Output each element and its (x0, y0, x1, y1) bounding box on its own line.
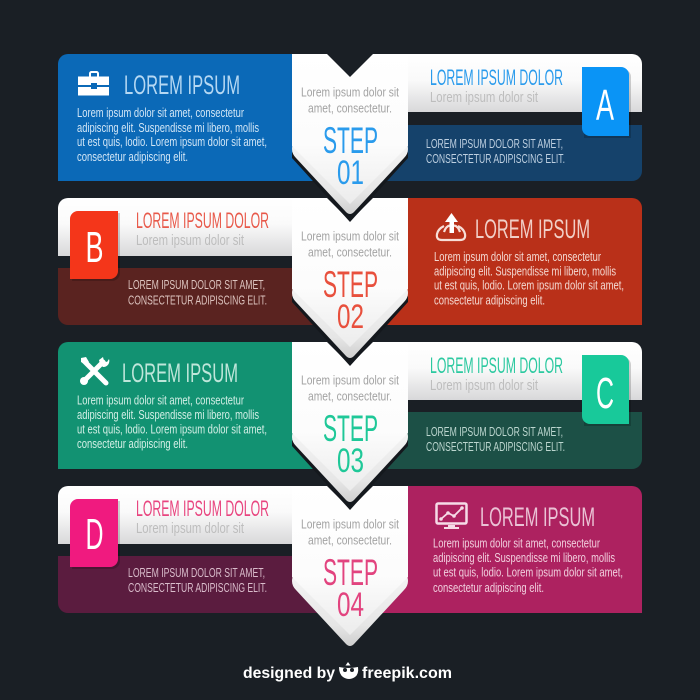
arrow step 04 (292, 486, 408, 646)
arrow step 01: STEP (323, 120, 378, 161)
badge C (582, 355, 631, 426)
arrow step 03: STEP (323, 408, 378, 449)
arrow step 02: Lorem ipsum dolor sit (301, 228, 399, 244)
caps text A: LOREM IPSUM DOLOR SIT AMET, (426, 137, 563, 151)
subheading A: Lorem ipsum dolor sit (430, 89, 539, 106)
subheading B: Lorem ipsum dolor sit (136, 232, 245, 249)
body text: ut est quis, lodio. Lorem ipsum dolor sit amet, (434, 278, 624, 292)
caps text D: LOREM IPSUM DOLOR SIT AMET, (128, 566, 265, 580)
panel: A right white (408, 54, 642, 112)
footer credit (243, 662, 452, 682)
caps text C: CONSECTETUR ADIPISCING ELIT. (426, 440, 565, 454)
arrow step 04: 04 (337, 586, 364, 624)
body text: Lorem ipsum dolor sit amet, consectetur (433, 536, 600, 550)
panel: C right white (408, 342, 642, 400)
heading B: LOREM IPSUM DOLOR (136, 208, 269, 233)
body text (77, 106, 267, 164)
arrow step 02: amet, consectetur. (308, 244, 392, 260)
heading C: LOREM IPSUM DOLOR (430, 353, 563, 378)
body text: consectetur adipiscing elit. (77, 150, 188, 164)
arrow step 02: 02 (337, 298, 364, 336)
panel: B dark band (58, 268, 330, 325)
step 3 row (58, 342, 642, 510)
icon: briefcase (78, 72, 109, 96)
panel: B left white (58, 198, 292, 256)
subheading D: Lorem ipsum dolor sit (136, 520, 245, 537)
arrow step 01: amet, consectetur. (308, 100, 392, 116)
arrow step 02: STEP (323, 264, 378, 305)
body text: ut est quis, lodio. Lorem ipsum dolor sit amet, (77, 422, 267, 436)
caps text B (128, 278, 267, 308)
caps text D: CONSECTETUR ADIPISCING ELIT. (128, 581, 267, 595)
body text: Lorem ipsum dolor sit amet, consectetur (77, 106, 244, 120)
heading: LOREM IPSUM (124, 70, 240, 100)
caps text C (426, 425, 565, 454)
step 2 row (58, 198, 642, 366)
caps text C: LOREM IPSUM DOLOR SIT AMET, (426, 425, 563, 439)
subheading C: Lorem ipsum dolor sit (430, 377, 539, 394)
icon: cloud upload (437, 213, 465, 240)
badge D: D (86, 510, 104, 559)
body text (433, 536, 623, 595)
caps text B: LOREM IPSUM DOLOR SIT AMET, (128, 278, 265, 292)
panel: C dark band (380, 412, 642, 469)
body text: adipiscing elit. Suspendisse mi libero, mollis (77, 121, 259, 135)
arrow step 01 (292, 54, 408, 222)
badge B (70, 211, 120, 281)
arrow step 04: Lorem ipsum dolor sit (301, 516, 399, 532)
body text (77, 394, 267, 451)
panel: D left white (58, 486, 292, 544)
caps text B: CONSECTETUR ADIPISCING ELIT. (128, 294, 267, 308)
panel: blue content (58, 54, 320, 181)
panel: D dark band (58, 556, 330, 613)
arrow step 01: Lorem ipsum dolor sit (301, 84, 399, 100)
icon: freepik logo (339, 662, 358, 679)
panel: pink content (380, 486, 642, 613)
badge A (582, 67, 631, 138)
badge B: B (86, 223, 104, 272)
badge C: C (596, 369, 614, 418)
heading: LOREM IPSUM (480, 502, 595, 532)
step 4 row (58, 486, 642, 646)
body text: adipiscing elit. Suspendisse mi libero, mollis (434, 264, 616, 278)
icon: monitor chart (436, 504, 466, 529)
icon: tools (80, 357, 109, 385)
footer credit: designed by (243, 665, 335, 682)
arrow step 04: amet, consectetur. (308, 532, 392, 548)
arrow step 03: amet, consectetur. (308, 388, 392, 404)
body text: Lorem ipsum dolor sit amet, consectetur (77, 394, 244, 408)
arrow step 02 (292, 198, 408, 366)
arrow step 01: 01 (337, 154, 364, 192)
body text (434, 250, 624, 308)
caps text A: CONSECTETUR ADIPISCING ELIT. (426, 152, 565, 166)
body text: consectetur adipiscing elit. (77, 437, 188, 451)
caps text D (128, 566, 267, 595)
step 1 row (58, 54, 642, 222)
arrow step 04: STEP (323, 552, 378, 593)
body text: Lorem ipsum dolor sit amet, consectetur (434, 250, 601, 264)
body text: consectetur adipiscing elit. (434, 294, 545, 308)
panel: red content (380, 198, 642, 325)
panel: A dark band (380, 125, 642, 181)
heading: LOREM IPSUM (122, 358, 238, 388)
body text: adipiscing elit. Suspendisse mi libero, mollis (77, 408, 259, 422)
body text: adipiscing elit. Suspendisse mi libero, mollis (433, 551, 615, 565)
badge D (70, 499, 120, 569)
body text: ut est quis, lodio. Lorem ipsum dolor sit amet, (77, 135, 267, 149)
panel: green content (58, 342, 320, 469)
body text: ut est quis, lodio. Lorem ipsum dolor sit amet, (433, 566, 623, 580)
arrow step 03: 03 (337, 442, 364, 480)
arrow step 03: Lorem ipsum dolor sit (301, 372, 399, 388)
heading A: LOREM IPSUM DOLOR (430, 65, 563, 90)
body text: consectetur adipiscing elit. (433, 581, 544, 595)
heading D: LOREM IPSUM DOLOR (136, 496, 269, 521)
arrow step 03 (292, 342, 408, 510)
footer credit: freepik.com (362, 665, 452, 682)
badge A: A (596, 81, 614, 130)
heading: LOREM IPSUM (475, 214, 590, 244)
caps text A (426, 137, 565, 166)
